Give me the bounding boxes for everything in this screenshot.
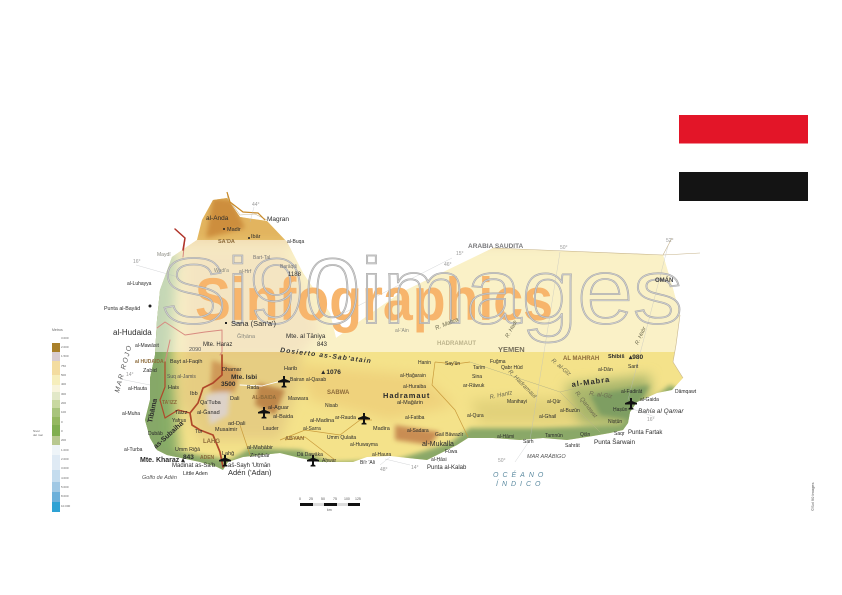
map labels: southwest: Madira — [373, 426, 391, 432]
map labels: east: ▴980 — [628, 354, 643, 361]
map labels: east: Saqr — [614, 431, 625, 437]
map labels: east: ÍNDICO — [496, 479, 544, 488]
map labels: north: al-Anda — [206, 215, 229, 222]
map labels: north: Ğīḥāna — [237, 333, 256, 340]
map labels: southwest: Mte. Isbi — [231, 374, 257, 381]
map labels: east: Hanin — [418, 360, 431, 366]
map labels: southwest: Adén ('Adan) — [228, 468, 272, 477]
elevation legend: 400 — [61, 382, 66, 386]
elevation legend: 200 — [61, 438, 66, 442]
map labels: east: al-Gaida — [640, 397, 659, 403]
map labels: east: Sina — [472, 374, 482, 380]
map labels: southwest: aš-Sayh 'Utmān — [228, 463, 270, 469]
map labels: east: 16° — [647, 417, 655, 423]
map labels: southwest: MAR ROJO — [114, 344, 134, 394]
elevation legend: del mar — [33, 433, 43, 437]
map labels: east: Sarh — [523, 439, 534, 445]
graticule lines — [120, 207, 668, 465]
map labels: southwest: Lauder — [263, 426, 279, 432]
map labels: southwest: Suq al-Jamis — [167, 374, 196, 380]
map labels: north: al-Hrf — [239, 269, 252, 275]
map labels: east: Tamnūn — [545, 433, 563, 439]
elevation legend: 200 — [61, 401, 66, 405]
elevation legend: 0 — [61, 420, 63, 424]
map labels: southwest: Taizz — [175, 410, 188, 416]
map labels: southwest: al-Haura — [372, 452, 391, 458]
elevation legend: Nivel — [33, 429, 40, 433]
elevation legend: 1.000 — [61, 448, 69, 452]
elevation legend: 1.500 — [61, 354, 69, 358]
elevation legend — [33, 328, 71, 512]
map labels: southwest: as-Subaiha — [153, 420, 185, 450]
map labels: north: 843 — [317, 342, 328, 348]
scale bar: 0 — [299, 497, 301, 501]
scale bar: 125 — [355, 497, 361, 501]
map labels: southwest: TA'IZZ — [162, 400, 177, 406]
map labels: southwest: al-Hauta — [128, 386, 147, 392]
map labels: southwest: Lahğ — [222, 451, 234, 457]
map labels: southwest: Yafrus — [172, 418, 187, 424]
map labels: southwest: al-Aguar — [268, 405, 289, 411]
map labels: southwest: ABYAN — [285, 436, 304, 442]
flag of Yemen — [679, 115, 808, 201]
rivers — [240, 362, 610, 460]
map labels: north: Bart-Tal — [253, 255, 270, 261]
map labels: southwest: Dā Dawāka — [297, 452, 323, 458]
map labels: southwest: Bayt al-Faqih — [170, 359, 202, 365]
map labels: east: 14° — [411, 465, 419, 471]
map labels: east: 46° — [444, 262, 452, 268]
map labels: east: Tarim — [473, 365, 485, 371]
map labels: north: Magran — [267, 216, 289, 223]
map labels: east: R. Hadr — [505, 319, 520, 339]
watermark: grey outlined wordmark: Si90images — [160, 239, 683, 343]
map labels: east: 50° — [560, 245, 568, 251]
map labels: southwest: 843 — [183, 454, 194, 461]
map labels: southwest: Aḥwar — [322, 458, 337, 464]
map labels: north: Madir — [227, 227, 241, 233]
map labels: southwest — [114, 344, 391, 481]
map labels: east: al-Qūr — [547, 399, 561, 405]
map labels: north: Wadi'a — [214, 268, 229, 274]
map labels: southwest: ADEN — [200, 455, 215, 461]
map labels: north: Punta al-Bayād — [104, 306, 140, 312]
elevation legend: 2.000 — [61, 345, 69, 349]
map labels: southwest: Bi'r 'Ali — [360, 460, 375, 466]
elevation legend: 750 — [61, 364, 66, 368]
elevation legend: 4.000 — [61, 476, 69, 480]
map: terrain of Yemen — [130, 190, 690, 480]
map labels: east: 48° — [380, 467, 388, 473]
map labels: southwest: ad-Dali — [228, 421, 245, 427]
map labels: east: 52° — [666, 238, 674, 244]
map labels: east: Sahrāt — [565, 443, 580, 449]
map labels: east: al-Huraiba — [403, 384, 426, 390]
map labels: southwest: Tibāma — [147, 398, 159, 423]
map labels: east: al-Fadirāt — [621, 389, 643, 395]
map labels: southwest: al-Turba — [124, 447, 143, 453]
elevation legend: 2.000 — [61, 457, 69, 461]
roads — [157, 229, 285, 467]
elevation legend: 3.000 — [61, 336, 69, 340]
map labels: southwest: al-Maḥābir — [247, 445, 273, 451]
map labels: north — [104, 202, 409, 353]
image credit: ©Sol 90 Images — [810, 482, 815, 511]
map labels: north: Barāqiš — [280, 264, 297, 270]
map labels: east: al-Qura — [467, 413, 484, 419]
map labels: east: Bahía al Qamar — [638, 408, 684, 415]
scale bar: km — [327, 508, 332, 512]
map labels: southwest: Umm Riğā — [175, 447, 200, 453]
map labels: east: R. Qanawat — [573, 391, 598, 419]
elevation legend: 3.000 — [61, 466, 69, 470]
map labels: east: al-Buzūn — [560, 408, 580, 414]
map labels: east: Punta al-Kalab — [427, 465, 467, 471]
map labels: southwest: Nisab — [325, 403, 338, 409]
map labels: north: 16° — [133, 259, 141, 265]
map labels: east: Sarit — [628, 364, 639, 370]
map labels: southwest: LAHG — [203, 439, 220, 445]
map labels: east: al-Ghail — [539, 414, 556, 420]
map labels: east: Shibiš — [608, 354, 625, 360]
map labels: southwest: 3500 — [221, 381, 236, 388]
map labels: east: R. al-Gīz — [550, 358, 571, 378]
map labels: east: MAR ARÁBIGO — [527, 453, 566, 460]
scale bar: 25 — [309, 497, 313, 501]
map labels: southwest: Harib — [284, 366, 297, 372]
map labels: southwest: Dosierto as-Sab'atain — [280, 347, 372, 365]
map labels: east: 15° — [456, 251, 464, 257]
map labels: north: Mte. Haraz — [203, 342, 232, 348]
elevation legend: 300 — [61, 392, 66, 396]
map labels: east: Gail Bāwazīr — [435, 432, 464, 438]
map labels: north: 44° — [252, 202, 260, 208]
map labels: east: Dāmqawt — [675, 389, 697, 395]
map labels: southwest: AL-BAIDA — [252, 395, 277, 401]
map labels: east: al-Sadara — [407, 428, 429, 434]
map labels: southwest: SABWA — [327, 390, 350, 396]
map labels: southwest: Ibb — [190, 391, 198, 397]
watermark: orange wordmark: Sinfographics — [195, 266, 553, 333]
elevation legend: 5.000 — [61, 485, 69, 489]
map labels: southwest: Umm Qulaita — [327, 435, 356, 441]
map labels: east: AL MAHRAH — [563, 356, 599, 362]
map labels: southwest: 14° — [126, 372, 134, 378]
map labels: east: HADRAMAUT — [437, 341, 476, 347]
map labels: north: SA'DA — [218, 239, 235, 245]
map labels: southwest: Qa'Tuba — [200, 400, 222, 406]
map labels: north: al-Hudaida — [113, 328, 152, 337]
map labels: southwest: Madinat as-Sa'b — [172, 463, 216, 469]
map labels: southwest: Zinğibār — [250, 453, 270, 459]
map labels: north: 2090 — [189, 347, 201, 353]
map labels: north: Sana (San'a') — [231, 319, 276, 328]
map labels: southwest: Mte. Kharaz ▴ — [140, 457, 185, 464]
map labels: east: Say'ūn — [445, 361, 460, 367]
elevation legend: Metros — [52, 328, 63, 332]
map labels: east: al-Maǧārin — [397, 400, 423, 406]
map labels: east: al-Ḥağarain — [400, 373, 426, 379]
map labels: east — [380, 238, 697, 488]
map labels: east: al-Hāmi — [497, 434, 514, 440]
map labels: east: Punta Fartak — [628, 430, 663, 436]
map labels: north: 1188 — [288, 272, 302, 278]
map labels: east: Punta Šarwain — [594, 437, 635, 446]
map labels: east: 50° — [498, 458, 506, 464]
map labels: east: al-Mukalla — [422, 441, 454, 448]
map labels: north: Mte. al Tāniya — [286, 333, 326, 340]
map labels: north: Maydī — [157, 252, 171, 258]
map labels: east: Qišn — [580, 432, 590, 438]
map labels: east: Hadramaut — [383, 391, 430, 400]
map labels: east: Qabr Hūd — [501, 365, 523, 371]
map labels: north: al-Mawāsit — [135, 343, 160, 349]
scale bar: 100 — [344, 497, 350, 501]
map labels: southwest: Rada — [247, 385, 259, 391]
elevation legend: 10.000 — [61, 504, 71, 508]
map labels: east: ARABIA SAUDITA — [468, 243, 524, 250]
map labels: southwest: Dali — [230, 396, 239, 402]
map labels: east: Fūwa — [445, 449, 457, 455]
map labels: southwest: al-Sarra — [303, 426, 321, 432]
elevation legend: 500 — [61, 373, 66, 377]
map labels: east: R. al-Gīz — [589, 391, 613, 400]
map labels: east: Fuğma — [490, 359, 506, 365]
map labels: southwest: al HUDAIDA — [135, 359, 164, 365]
elevation legend: 0 — [61, 429, 63, 433]
map labels: southwest: al-Huwayma — [350, 442, 378, 448]
map labels: east: R. Hadramaut — [507, 369, 537, 400]
elevation legend: 8.000 — [61, 494, 69, 498]
map labels: east: R. Ḥabr — [634, 325, 648, 346]
washed-out band — [130, 240, 690, 352]
map labels: east: al-Ḥāsi — [431, 457, 447, 463]
map labels: southwest: Musaimir — [215, 427, 237, 433]
map labels: north: al-Luhayya — [127, 281, 152, 287]
map labels: east: R. Mahra — [435, 317, 460, 332]
map labels: east: Niṣṭūn — [608, 419, 622, 425]
map labels: east: Ḥaṣūn — [613, 407, 628, 413]
scale bar: 75 — [333, 497, 337, 501]
map labels: southwest: Zabid — [143, 368, 157, 374]
scale bar: 50 — [321, 497, 325, 501]
map labels: east: al-Fatiba — [405, 415, 425, 421]
map labels: east: OMÁN — [655, 277, 673, 284]
map labels: southwest: Dhamar — [222, 367, 242, 373]
map labels: southwest: Hais — [168, 385, 179, 391]
map labels: east: YEMEN — [498, 345, 525, 354]
map labels: southwest: Bairan al-Qasab — [290, 377, 326, 383]
map labels: north: al-'Ain — [395, 328, 409, 334]
map labels: east: OCÉANO — [493, 470, 547, 479]
map labels: north: al-Buqa — [287, 239, 304, 245]
map labels: southwest: Golfo de Adén — [142, 475, 177, 481]
map labels: southwest: al-Ğanad — [197, 409, 220, 416]
map labels: east: al-Mabra — [571, 375, 611, 389]
scale bar — [299, 497, 361, 512]
map labels: southwest: Maswara — [288, 396, 309, 402]
map labels: southwest: Tur — [195, 429, 203, 435]
map labels: southwest: al-Muha — [122, 411, 140, 417]
elevation legend: 100 — [61, 410, 66, 414]
map labels: east: R. Hanīz — [489, 390, 513, 401]
map labels: southwest: ▲1076 — [320, 369, 341, 376]
map labels: southwest: ar-Rauda — [335, 415, 356, 421]
map labels: east: ar-Rāwuk — [463, 383, 485, 389]
map labels: southwest: Little Aden — [183, 471, 208, 477]
map labels: east: al-Dān — [598, 367, 613, 373]
map labels: north: Ibār — [251, 234, 261, 240]
icons: airports — [219, 376, 637, 466]
map labels: southwest: al-Baida — [273, 414, 294, 420]
watermark: grey outlined wordmark: Si90images — [160, 239, 683, 343]
map labels: southwest: al-Madina — [310, 418, 335, 424]
map labels: southwest: Dubāb — [148, 431, 163, 437]
map labels: east: Manihayi — [507, 399, 527, 405]
